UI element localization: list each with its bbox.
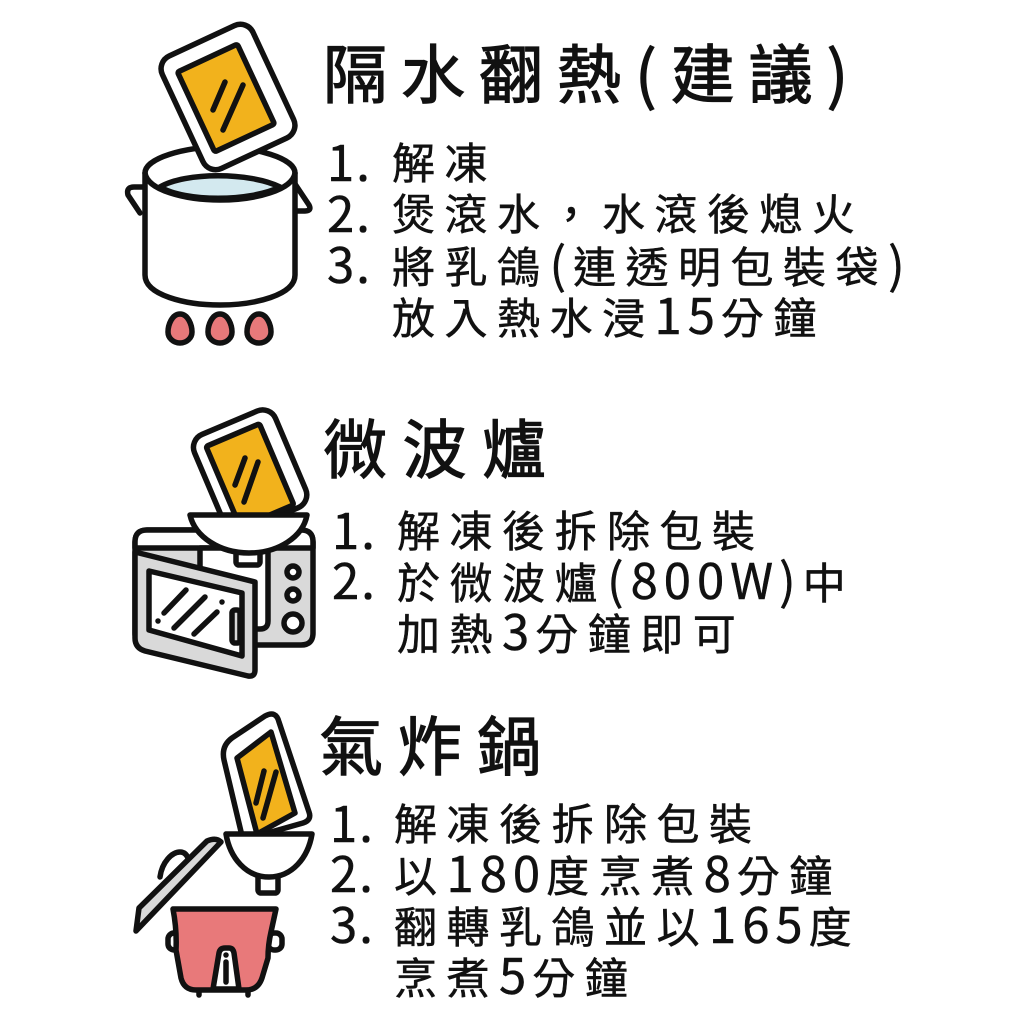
door window xyxy=(149,571,242,656)
interior xyxy=(200,548,268,629)
steps: microwave: 1. xyxy=(332,493,377,564)
window indicator and feet xyxy=(199,955,248,995)
top band xyxy=(135,530,313,548)
step 1 xyxy=(327,125,497,196)
step 3 continued: 烹煮5分鐘 xyxy=(394,938,637,1009)
steps: microwave: 解凍後拆除包裝 xyxy=(397,498,764,560)
bowl xyxy=(226,834,312,893)
lid xyxy=(136,839,221,931)
step 3 xyxy=(330,887,861,958)
buttons xyxy=(284,566,302,632)
heading: water bath: 隔水翻熱(建議) xyxy=(323,25,862,117)
steps: water bath: 2. xyxy=(327,176,372,247)
front window xyxy=(213,948,239,989)
steps: microwave xyxy=(332,493,855,665)
step 2 xyxy=(327,176,864,247)
steps: water bath: 解凍 xyxy=(392,130,497,192)
steps: water bath: 1. xyxy=(327,125,372,196)
steps: air fryer: 3. xyxy=(330,887,375,958)
door handle xyxy=(232,610,240,643)
heading: microwave: 微波爐 xyxy=(323,400,562,492)
step 2 xyxy=(332,543,855,614)
pack xyxy=(223,714,310,840)
step 1 xyxy=(332,493,764,564)
steps: water bath: 將乳鴿(連透明包裝袋) xyxy=(392,227,912,298)
window glare xyxy=(158,590,222,634)
step 3 xyxy=(327,227,912,298)
pack xyxy=(156,20,300,174)
steps: water bath xyxy=(327,125,912,349)
steps: microwave: 於微波爐(800W)中 xyxy=(397,543,855,614)
steps: air fryer xyxy=(330,786,861,1009)
steps: air fryer: 2. xyxy=(330,836,375,907)
steps: air fryer: 解凍後拆除包裝 xyxy=(394,791,762,853)
pot rim and water xyxy=(145,173,295,200)
step 2 xyxy=(330,836,842,907)
step 1 xyxy=(330,786,762,857)
step 2 continued: 加熱3分鐘即可 xyxy=(397,594,745,665)
bowl xyxy=(190,515,307,565)
pot body xyxy=(145,147,295,305)
steps: water bath: 煲滾水，水滾後熄火 xyxy=(392,181,864,243)
steps: air fryer: 1. xyxy=(330,786,375,857)
pot handles xyxy=(168,933,282,950)
pot handles xyxy=(128,184,310,217)
steps: microwave: 2. xyxy=(332,543,377,614)
steps: air fryer: 翻轉乳鴿並以165度 xyxy=(394,887,861,958)
step 3 continued: 放入熱水浸15分鐘 xyxy=(392,278,826,349)
steps: water bath: 3. xyxy=(327,227,372,298)
fryer pot xyxy=(173,909,276,990)
flames xyxy=(168,314,271,343)
microwave body xyxy=(135,530,313,645)
pack xyxy=(189,406,311,537)
open door xyxy=(135,552,255,676)
steps: air fryer: 以180度烹煮8分鐘 xyxy=(394,836,842,907)
heading: air fryer: 氣炸鍋 xyxy=(319,697,556,789)
